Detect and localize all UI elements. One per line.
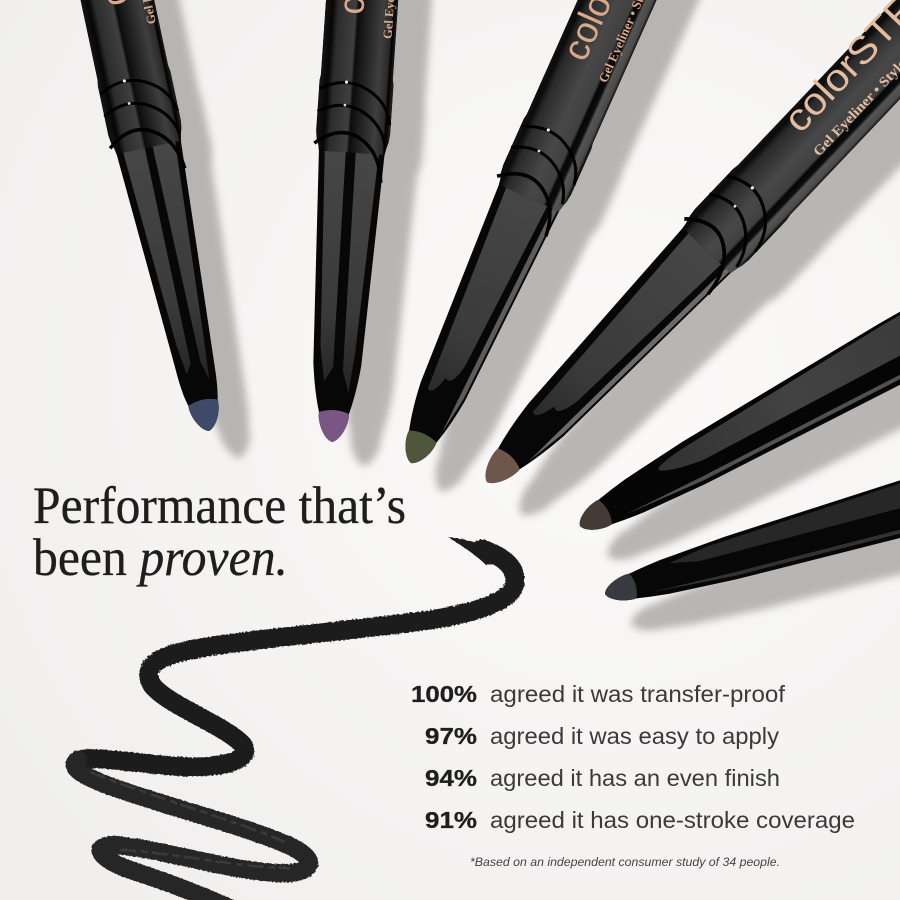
eyeliner swatch stroke — [75, 537, 515, 900]
pencil 2: purple — [294, 0, 423, 445]
stat: 94%: 94% — [425, 765, 477, 791]
stat: 94%: agreed it has an even finish — [490, 765, 780, 791]
pencil 3: olive — [376, 0, 770, 478]
barrel reflection — [418, 188, 547, 403]
barrel sheen — [646, 107, 900, 488]
heading — [33, 477, 406, 587]
pencil 4: bronze — [454, 0, 900, 507]
lead tip: navy — [188, 397, 224, 434]
barrel sheen — [663, 342, 900, 578]
pencil 1: navy — [6, 0, 245, 439]
lead tip: olive — [397, 428, 438, 469]
stroke taper — [448, 537, 510, 565]
stat: 100%: 100% — [411, 681, 477, 707]
silhouette — [377, 0, 770, 478]
upper body — [680, 0, 900, 276]
upper body — [6, 0, 185, 155]
silhouette — [6, 0, 245, 439]
lead tip: dark brown — [573, 498, 615, 538]
stat: 97%: 97% — [425, 723, 477, 749]
collar rings — [658, 167, 787, 298]
collar rings — [483, 117, 591, 238]
pencil 5: dark brown — [562, 105, 900, 559]
heading line 2: been proven. — [33, 529, 288, 587]
pencil shadows — [37, 0, 900, 658]
silhouette — [460, 0, 900, 507]
barrel reflection — [525, 233, 721, 437]
lead tip: bronze — [476, 446, 522, 492]
barrel reflections — [123, 148, 193, 378]
stroke texture — [90, 772, 290, 868]
collar rings — [312, 79, 393, 183]
footnote: *Based on an independent consumer study of 34 people. — [470, 857, 780, 869]
upper body — [315, 0, 423, 155]
silhouette — [295, 0, 423, 445]
collar rings — [97, 70, 190, 183]
stat: 100%: agreed it was transfer-proof — [490, 681, 786, 707]
barrel edge strip — [442, 205, 557, 439]
barrel edge strip — [529, 262, 729, 471]
barrel reflections — [309, 151, 348, 382]
pencil 6: black — [595, 340, 900, 628]
stat: 97%: agreed it was easy to apply — [490, 723, 780, 749]
barrel edge strip — [651, 384, 900, 609]
stat: 91%: 91% — [425, 807, 477, 833]
stats list — [411, 681, 855, 833]
lead tip: purple — [317, 409, 349, 443]
upper body — [495, 0, 770, 213]
silhouette — [562, 105, 900, 559]
stroke lower body — [75, 760, 309, 900]
lead tip: black — [601, 573, 639, 606]
stat: 91%: agreed it has one-stroke coverage — [490, 807, 855, 833]
barrel edge strip — [625, 149, 900, 531]
stroke upper body — [78, 549, 515, 767]
silhouette — [595, 340, 900, 628]
heading line 1: Performance that’s — [33, 477, 406, 535]
